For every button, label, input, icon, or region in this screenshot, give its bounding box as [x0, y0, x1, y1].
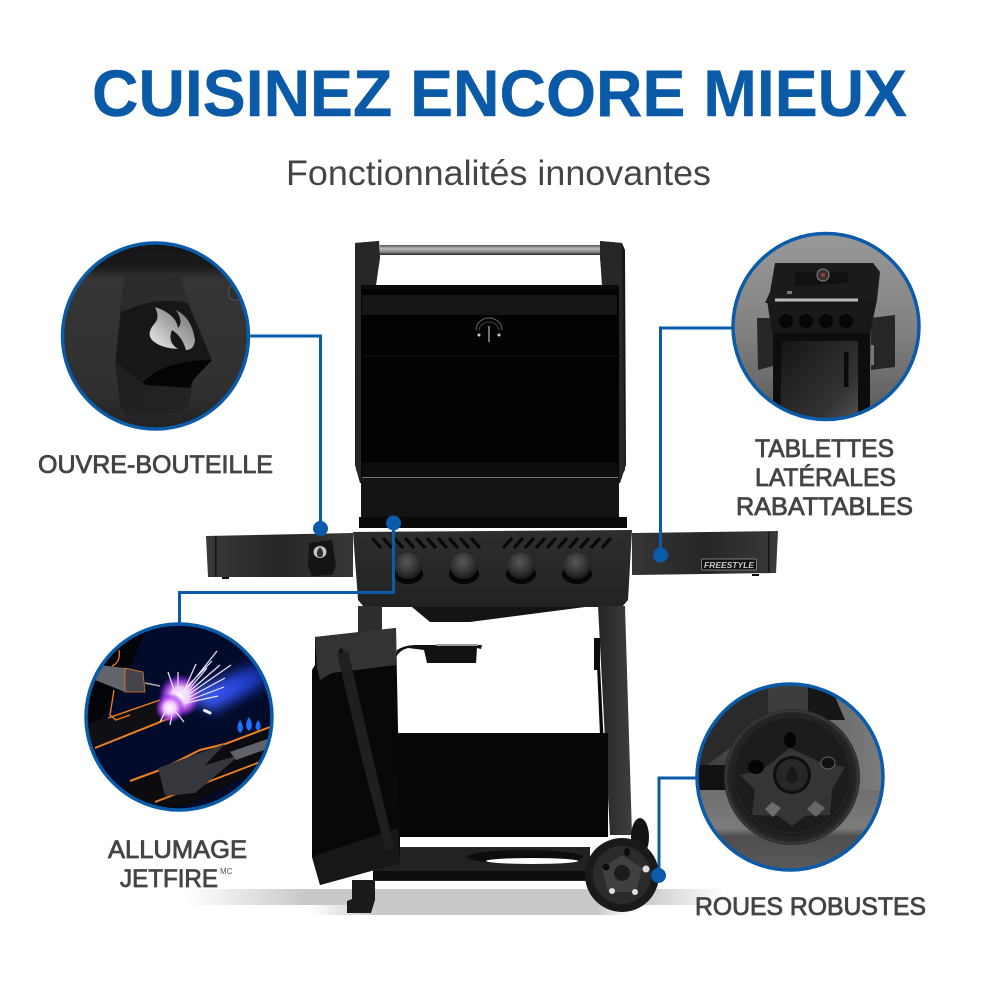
side opener on shelf: [308, 540, 336, 576]
blue flames: [238, 717, 260, 733]
label: allumage jetfire: MC: [220, 867, 233, 876]
electrode: [95, 650, 160, 720]
underside burner: [412, 607, 585, 622]
bottom frame: [373, 847, 590, 881]
cart legs: [358, 606, 632, 835]
lid frame: [355, 241, 626, 483]
subtitle: Fonctionnalités innovantes: [286, 154, 711, 193]
label: ouvre-bouteille: OUVRE-BOUTEILLE: [38, 451, 273, 479]
label: tablettes latérales rabattables: RABATTABLES: [736, 493, 913, 521]
callout dots: [313, 516, 668, 883]
circle: side shelves: [730, 230, 922, 425]
vents: [372, 538, 611, 548]
label: tablettes latérales rabattables: [736, 435, 913, 521]
barbecue grill: [206, 241, 778, 913]
star spokes: [740, 748, 845, 826]
control knobs: [393, 552, 592, 584]
lower burner: [123, 727, 275, 810]
circle: robust wheels: [695, 680, 885, 875]
callout connector: wheels: [659, 778, 699, 875]
label: tablettes latérales rabattables: TABLETTES: [755, 435, 894, 463]
wheel: [585, 818, 659, 912]
callout connector: side shelves: [660, 328, 735, 555]
mini grill: [773, 333, 870, 412]
right side shelf: [632, 531, 778, 576]
spark core: [158, 674, 202, 718]
callout connector: bottle opener: [248, 336, 320, 528]
control panel: [353, 530, 632, 607]
floor shadow: [185, 889, 725, 915]
label: allumage jetfire: [108, 836, 247, 893]
freestyle badge: FREESTYLE: [704, 561, 755, 570]
torch glow: [185, 664, 270, 712]
label: allumage jetfire: ALLUMAGE: [108, 836, 247, 864]
left side shelf: [206, 533, 353, 579]
title: CUISINEZ ENCORE MIEUX: [92, 56, 907, 130]
lower firebox: [361, 479, 619, 519]
drip tray: [396, 644, 482, 663]
wheel tyre: [724, 709, 860, 845]
label: roues robustes: ROUES ROBUSTES: [695, 893, 926, 921]
flame logo: [150, 307, 195, 350]
open door: [312, 628, 400, 885]
lower back panel: [393, 733, 608, 837]
lid handle: [380, 245, 600, 255]
sparks: [160, 651, 231, 725]
label: tablettes latérales rabattables: LATÉRALES: [755, 463, 896, 492]
circle: jetfire ignition: [84, 622, 275, 812]
thermometer back: [476, 318, 502, 342]
foot: [347, 880, 375, 913]
upper-left burner: [88, 701, 165, 749]
label: allumage jetfire: JETFIRE: [120, 865, 218, 893]
circle: bottle opener: [60, 240, 252, 432]
callout connector: ignition: [180, 523, 394, 626]
opener body: [115, 299, 192, 411]
